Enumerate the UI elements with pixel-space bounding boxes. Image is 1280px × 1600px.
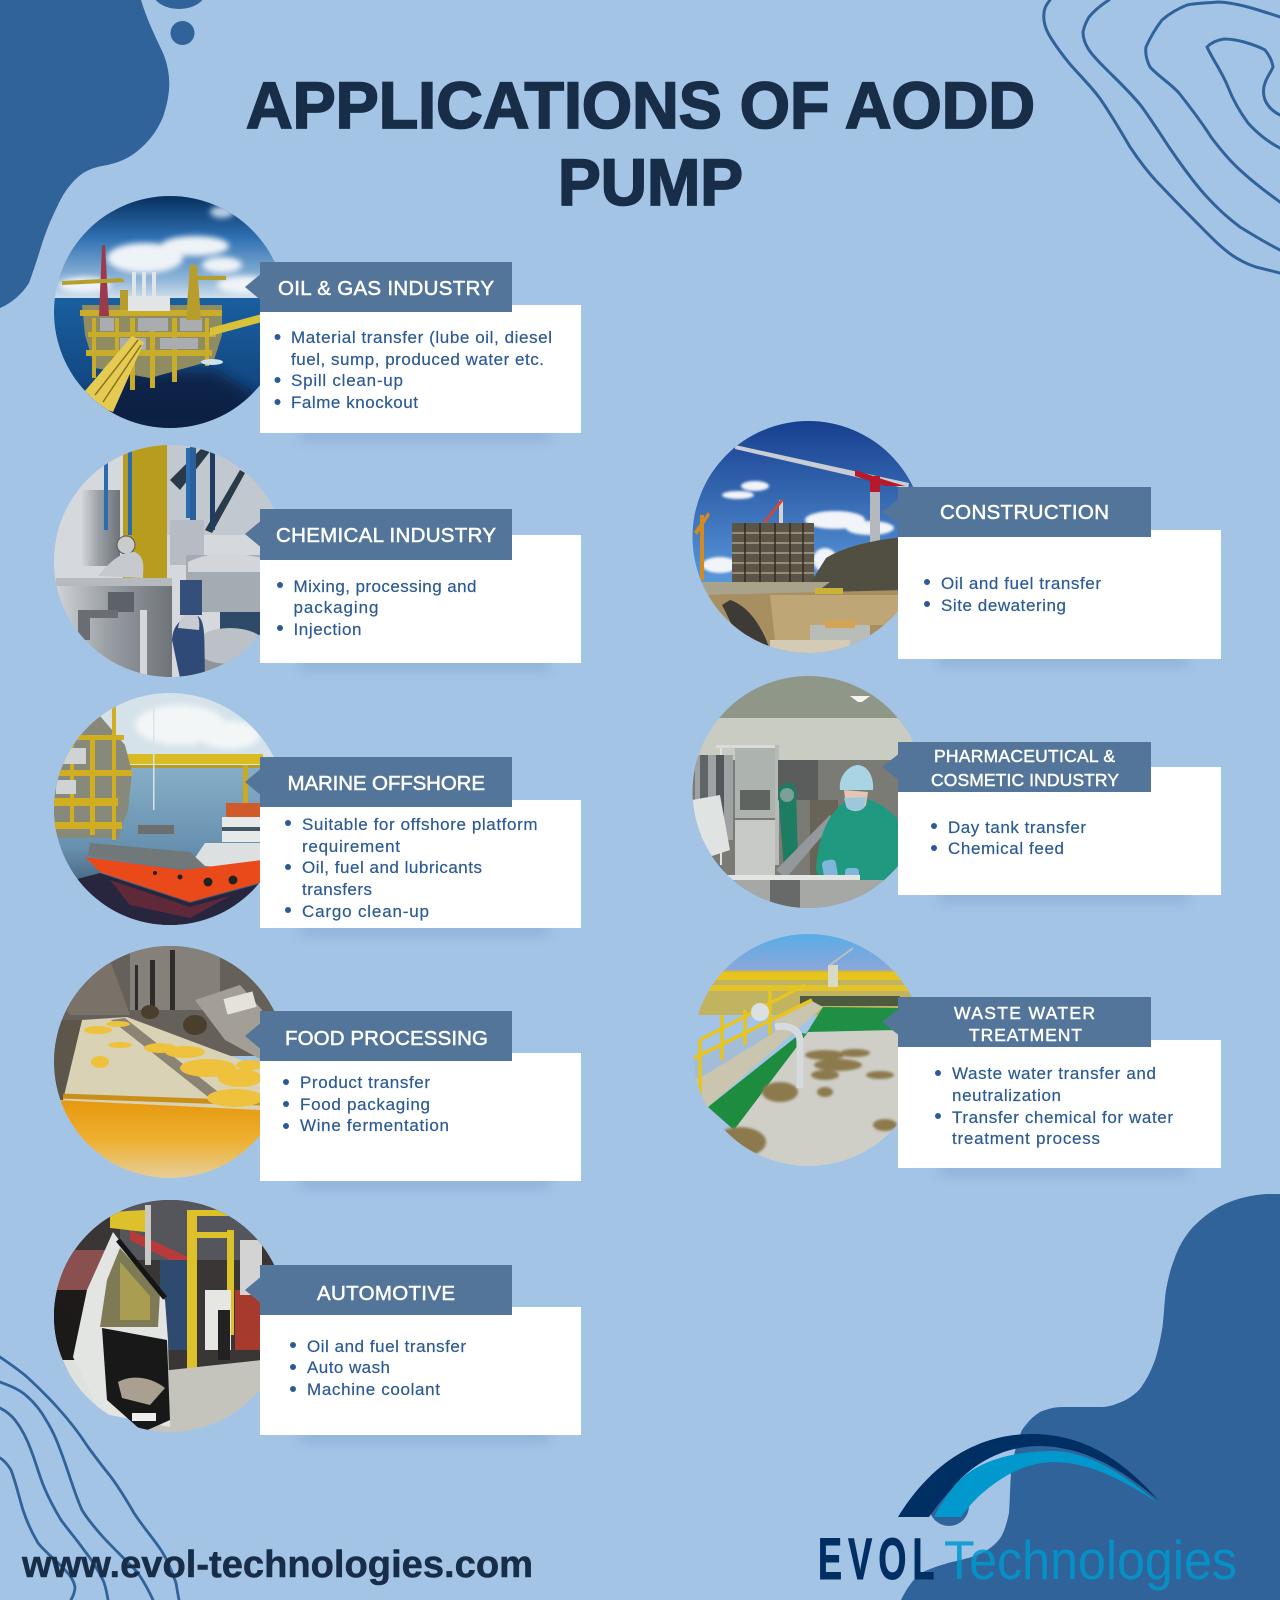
bullet list: pharmaceutical: Day tank transfer <box>948 818 1086 837</box>
bullet list: automotive <box>290 1337 466 1399</box>
bullet list: automotive: Oil and fuel transfer <box>307 1337 466 1356</box>
bullet list: automotive: Auto wash <box>307 1358 390 1377</box>
website url: www.evol-technologies.com <box>21 1544 533 1586</box>
bullet list: oil and gas <box>274 328 552 412</box>
panel: automotive <box>54 1200 581 1443</box>
white card: automotive <box>260 1307 581 1443</box>
heading: construction: CONSTRUCTION <box>940 501 1109 524</box>
bullet list: construction <box>924 574 1101 615</box>
heading: chemical: CHEMICAL INDUSTRY <box>276 524 496 547</box>
white card: chemical <box>260 535 581 671</box>
bullet list: marine: Suitable for offshore platform <box>302 815 538 834</box>
bullet list: waste water: treatment process <box>952 1129 1100 1148</box>
title: PUMP <box>558 145 743 219</box>
bullet list: food: Product transfer <box>300 1073 430 1092</box>
bullet list: waste water: Transfer chemical for water <box>952 1108 1173 1127</box>
bullet list: chemical <box>277 577 476 639</box>
bullet list: oil and gas: fuel, sump, produced water etc. <box>291 350 544 369</box>
bullet list: oil and gas: Spill clean-up <box>291 371 403 390</box>
logo wordmark <box>818 1527 1237 1592</box>
logo wordmark: EVOL <box>818 1527 941 1592</box>
logo: EVOL Technologies <box>818 1434 1237 1592</box>
white card: construction <box>898 530 1221 667</box>
bullet list: marine: Oil, fuel and lubricants <box>302 858 482 877</box>
bullet list: oil and gas: Material transfer (lube oil, diesel <box>291 328 552 347</box>
photo: construction site and crane <box>692 421 926 660</box>
photo: pharmaceutical production line <box>692 676 926 910</box>
panel: food processing <box>54 946 581 1189</box>
photo: chemical plant tanks <box>54 445 286 680</box>
heading: chemical <box>245 509 512 560</box>
heading: construction <box>882 487 1151 537</box>
heading: oil and gas <box>245 262 512 312</box>
title: APPLICATIONS OF AODD <box>246 68 1035 142</box>
bullet list: chemical: packaging <box>294 598 378 617</box>
heading: waste water: TREATMENT <box>969 1025 1082 1045</box>
photo: car assembly line <box>54 1200 286 1436</box>
bullet list: oil and gas: Falme knockout <box>291 393 418 412</box>
photo: offshore oil platform <box>54 196 286 430</box>
panel: marine offshore <box>54 693 581 936</box>
panel: pharmaceutical and cosmetic <box>692 676 1221 910</box>
bullet list: marine <box>285 815 538 921</box>
photo: water treatment basin <box>692 933 926 1170</box>
heading: marine <box>245 757 512 807</box>
photo: platform and supply vessel <box>54 693 286 930</box>
heading: food <box>245 1011 512 1061</box>
white card: marine <box>260 800 581 936</box>
logo swoosh <box>898 1434 1158 1526</box>
heading: marine: MARINE OFFSHORE <box>288 772 485 795</box>
bullet list: chemical: Mixing, processing and <box>294 577 476 596</box>
bullet list: waste water <box>935 1064 1173 1148</box>
decorative blob: top left <box>0 0 206 308</box>
bullet list: pharmaceutical <box>931 818 1086 858</box>
bullet list: food: Food packaging <box>300 1095 430 1114</box>
heading: waste water: WASTE WATER <box>954 1003 1095 1023</box>
bullet list: food: Wine fermentation <box>300 1116 449 1135</box>
bullet list: chemical: Injection <box>294 620 362 639</box>
panel: waste water treatment <box>692 933 1221 1176</box>
panel: chemical industry <box>54 445 581 680</box>
bullet list: waste water: neutralization <box>952 1086 1061 1105</box>
white card: food <box>260 1053 581 1189</box>
heading: pharmaceutical: PHARMACEUTICAL & <box>934 746 1115 766</box>
logo wordmark: Technologies <box>944 1529 1237 1591</box>
bullet list: marine: requirement <box>302 837 400 856</box>
bullet list: food <box>283 1073 449 1135</box>
decorative contour lines: bottom left <box>0 1357 179 1600</box>
bullet list: construction: Oil and fuel transfer <box>941 574 1101 593</box>
panel: oil and gas industry <box>54 196 581 441</box>
title <box>246 68 1035 219</box>
bullet list: waste water: Waste water transfer and <box>952 1064 1156 1083</box>
panel: construction <box>692 421 1221 667</box>
bullet list: automotive: Machine coolant <box>307 1380 440 1399</box>
heading: pharmaceutical: COSMETIC INDUSTRY <box>931 770 1119 790</box>
heading: food: FOOD PROCESSING <box>285 1027 488 1050</box>
heading: automotive <box>245 1265 512 1315</box>
decorative contour lines: top right <box>1044 0 1280 273</box>
heading: pharmaceutical <box>882 742 1151 792</box>
white card: pharmaceutical <box>898 767 1221 903</box>
bullet list: marine: Cargo clean-up <box>302 902 429 921</box>
photo: corn on conveyor <box>54 946 286 1180</box>
bullet list: marine: transfers <box>302 880 372 899</box>
decorative blob: bottom right <box>901 1194 1280 1600</box>
heading: oil and gas: OIL & GAS INDUSTRY <box>278 277 494 300</box>
heading: automotive: AUTOMOTIVE <box>317 1282 455 1305</box>
bullet list: pharmaceutical: Chemical feed <box>948 839 1064 858</box>
heading: waste water <box>882 997 1151 1047</box>
bullet list: construction: Site dewatering <box>941 596 1066 615</box>
white card: oil and gas <box>260 305 581 441</box>
white card: waste water <box>898 1040 1221 1176</box>
